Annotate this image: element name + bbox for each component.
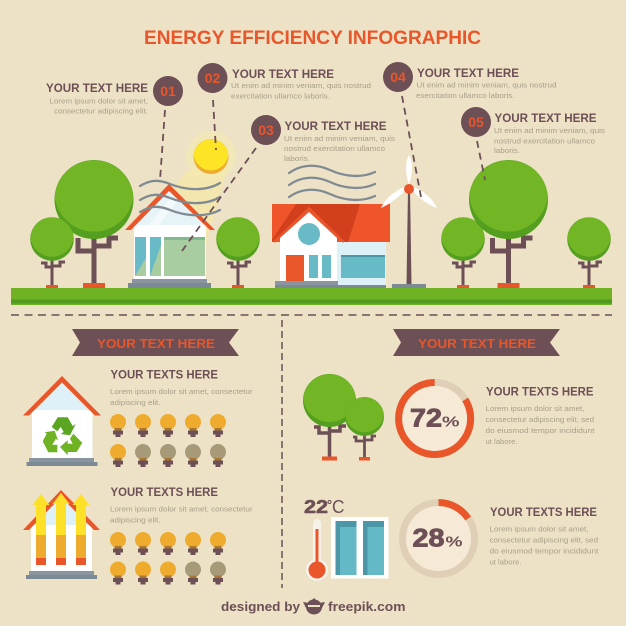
banner: right: YOUR TEXT HERE [418, 337, 536, 351]
callout 04 [383, 62, 556, 100]
footer credit: designed by [221, 599, 301, 614]
icon: thermometer [306, 519, 328, 581]
callout 05: YOUR TEXT HERE [494, 111, 596, 125]
callout 03: Ut enim ad minim veniam, quis [284, 134, 395, 143]
bulbs: first group [110, 414, 226, 467]
wavy lines: over red house [289, 166, 375, 200]
callout 03: laboris. [284, 154, 310, 163]
tree: large right [469, 160, 548, 288]
callout 05: Ut enim ad minim veniam, quis [494, 126, 605, 135]
icon: heat arrows house [23, 490, 100, 579]
text block: first left: YOUR TEXTS HERE [110, 368, 218, 382]
tree: small middle [216, 217, 260, 288]
callout 04: exercitation ullamco laboris. [416, 91, 514, 100]
tree: small right 2 [567, 217, 611, 288]
text block: 72% description: YOUR TEXTS HERE [486, 384, 594, 398]
tree: small right 1 [441, 217, 485, 288]
callout 04: YOUR TEXT HERE [417, 66, 519, 80]
text block: second left: YOUR TEXTS HERE [110, 485, 218, 499]
callout 04: 04 [390, 69, 406, 85]
text block: 72% description: ut labore. [486, 437, 518, 446]
callout 02 [198, 63, 371, 100]
callout 01: YOUR TEXT HERE [46, 81, 148, 95]
callout 01: 01 [160, 83, 176, 99]
callout 02: 02 [205, 70, 220, 86]
callout 05: nostrud exercitation ullamco [494, 136, 595, 146]
text block: 72% description [486, 384, 596, 446]
donut chart: 28% [402, 502, 474, 574]
callout 03: 03 [258, 122, 274, 138]
callout 03: YOUR TEXT HERE [284, 119, 386, 133]
footer credit: freepik.com [328, 599, 406, 614]
footer credit [221, 598, 406, 614]
text block: 28% description: YOUR TEXTS HERE [490, 505, 597, 519]
text block: 28% description [490, 505, 600, 566]
callout 05: laboris. [494, 146, 520, 155]
bulbs: second group [110, 532, 226, 584]
tree: large left [54, 160, 133, 288]
icon: recycling house [23, 376, 101, 466]
tree: small left [30, 217, 74, 288]
icon: arrow left [32, 494, 50, 565]
banner: right [393, 329, 560, 356]
text block: 28% description: do eiusmod tempor incididunt [490, 546, 600, 556]
text block: second left: Lorem ipsum dolor sit amet, consectetur [110, 504, 253, 514]
text block: first left: adipiscing elit. [110, 398, 160, 407]
house: glass house [125, 184, 215, 288]
icon: arrow right [72, 494, 90, 565]
callout 01: consectetur adipiscing elit. [54, 106, 148, 116]
text block: 28% description: ut labore. [490, 558, 522, 566]
icon: temperature reading [304, 497, 344, 517]
icon: temperature reading: 22 [304, 497, 328, 517]
icon: freepik mascot [303, 598, 325, 614]
callout 03: nostrud exercitation ullamco [284, 144, 385, 153]
callout 02: YOUR TEXT HERE [232, 67, 334, 81]
text block: second left: adipiscing elit. [110, 516, 160, 524]
text block: second left [110, 485, 253, 524]
banner: left [72, 329, 239, 356]
wavy lines: over glass house [140, 181, 220, 215]
text block: 72% description: do eiusmod tempor incididunt [486, 426, 596, 435]
donut chart: 72% [399, 382, 471, 454]
callout 03 [251, 115, 395, 163]
callout leader lines [160, 96, 485, 251]
title: ENERGY EFFICIENCY INFOGRAPHIC [144, 27, 481, 49]
text block: first left [110, 368, 253, 407]
text block: 28% description: Lorem ipsum dolor sit amet, [490, 524, 588, 534]
icon: pair of trees [303, 374, 384, 460]
callout 02: Ut enim ad minim veniam, quis nostrud [231, 81, 371, 90]
banner: left: YOUR TEXT HERE [97, 337, 215, 351]
wind turbine [381, 155, 437, 288]
sun [186, 131, 236, 181]
text block: 28% description: consectetur adipiscing elit, sed [490, 536, 598, 544]
icon: window [331, 517, 388, 578]
icon: recycle symbol [43, 417, 82, 455]
donut chart: 72%: 72 [410, 404, 442, 432]
callout 01 [46, 76, 183, 116]
callout 04: Ut enim ad minim veniam, quis nostrud [416, 80, 556, 90]
icon: arrow centre [52, 493, 70, 565]
callout 05: 05 [468, 114, 484, 130]
callout 02: exercitation ullamco laboris. [231, 92, 330, 100]
callout 05 [461, 107, 605, 155]
text block: first left: Lorem ipsum dolor sit amet, consectetur [110, 387, 253, 396]
donut chart: 72%: % [442, 414, 460, 430]
text block: 72% description: Lorem ipsum dolor sit amet, [486, 404, 584, 413]
icon: temperature reading: C [332, 497, 344, 517]
house: red roof house [272, 204, 390, 288]
sunlight beam [172, 165, 228, 245]
donut chart: 28%: % [446, 534, 463, 550]
ground [11, 288, 612, 305]
text block: 72% description: consectetur adipiscing elit, sed [486, 415, 594, 424]
donut chart: 28%: 28 [412, 524, 445, 552]
callout 01: Lorem ipsum dolor sit amet, [50, 96, 148, 106]
